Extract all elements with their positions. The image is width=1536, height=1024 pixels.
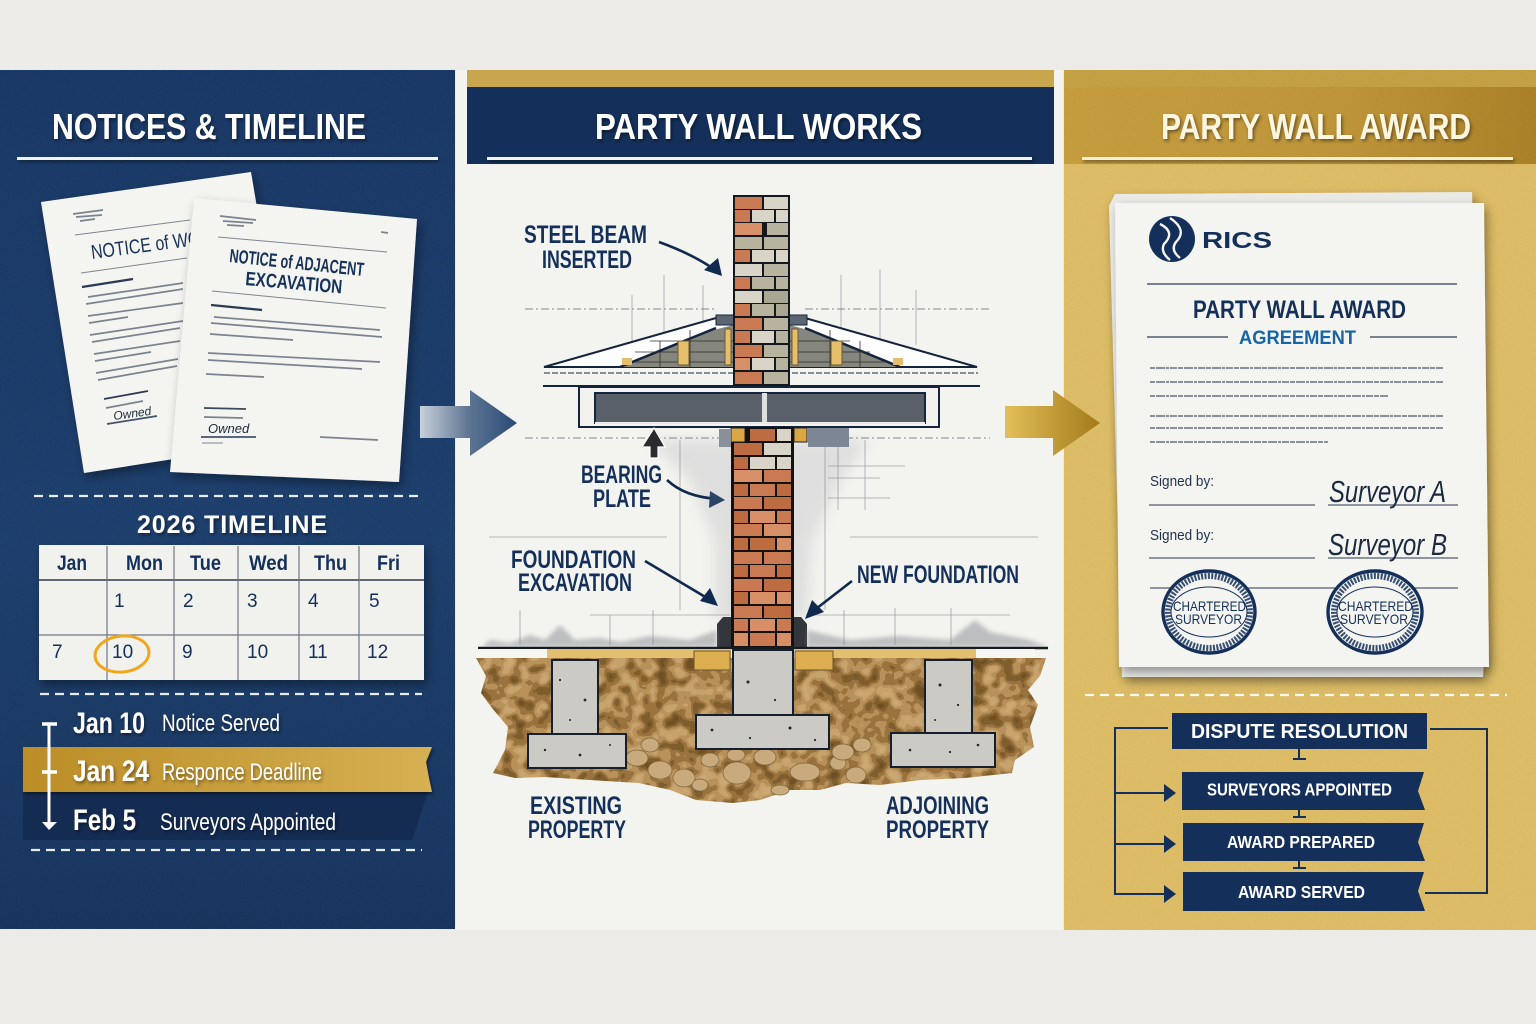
ribbon: surveyors appointed: [1182, 772, 1425, 810]
calendar dates: 1: [114, 591, 125, 612]
document subtitle: AGREEMENT: [1239, 328, 1356, 349]
award document: [1109, 192, 1489, 677]
labels: EXCAVATION: [518, 569, 632, 597]
calendar dates: 4: [308, 591, 319, 612]
roof: [543, 315, 980, 386]
labels: EXISTING: [530, 792, 622, 820]
labels: [511, 221, 1019, 844]
timeline entries: [73, 707, 336, 837]
document body text lines: [1150, 368, 1443, 442]
calendar dates: 7: [52, 642, 63, 663]
wall section diagram: [476, 195, 1048, 844]
stones: [626, 738, 871, 795]
document: notice of adjacent excavation: EXCAVATION: [245, 268, 343, 298]
upper brick column: [733, 195, 790, 386]
concrete foundations: [528, 650, 995, 768]
labels: NEW FOUNDATION: [857, 561, 1019, 589]
document title: PARTY WALL AWARD: [1193, 296, 1406, 324]
signature rows: Surveyor A: [1329, 474, 1446, 509]
calendar dates: 3: [247, 591, 258, 612]
calendar dates: 9: [182, 642, 193, 663]
stamp: chartered surveyor B: CHARTERED: [1338, 598, 1413, 614]
calendar header row: Tue: [190, 552, 221, 575]
calendar header row: [57, 552, 400, 575]
document: notice of adjacent excavation: [170, 198, 417, 482]
timeline arrow: [42, 724, 57, 830]
timeline entries: Feb 5: [73, 804, 136, 837]
labels: PROPERTY: [528, 816, 626, 844]
timeline entries: Jan 10: [73, 707, 145, 740]
labels: INSERTED: [542, 246, 632, 274]
ribbon: award served: [1183, 872, 1425, 911]
panel: party wall works: [456, 70, 1063, 930]
dispute resolution flow: [1115, 713, 1487, 911]
calendar header row: Mon: [126, 552, 163, 575]
heading: party wall works: [487, 106, 1032, 160]
heading: notices and timeline: [17, 106, 438, 160]
heading: party wall award: [1082, 106, 1513, 160]
box: dispute resolution: [1172, 713, 1427, 749]
panel: party wall award: [1064, 70, 1536, 930]
callout arrows: [645, 242, 852, 619]
ground line: [478, 620, 1048, 670]
stamp: chartered surveyor A: [1163, 571, 1255, 653]
calendar dates: [52, 591, 388, 663]
ribbon: award prepared: AWARD PREPARED: [1227, 832, 1375, 852]
signature rows: Surveyor B: [1328, 527, 1447, 562]
construction lines: [489, 270, 1038, 645]
heading: notices and timeline: NOTICES & TIMELINE: [52, 106, 366, 147]
calendar header row: Wed: [249, 552, 288, 575]
labels: BEARING: [581, 461, 662, 489]
document: notice of works: [41, 172, 296, 473]
labels: ADJOINING: [886, 792, 989, 820]
timeline entries: Responce Deadline: [162, 759, 322, 786]
ribbon: award prepared: [1183, 823, 1425, 861]
heading: party wall award: PARTY WALL AWARD: [1161, 106, 1471, 147]
calendar dates: 2: [183, 591, 194, 612]
labels: STEEL BEAM: [524, 221, 647, 249]
panel: notices and timeline: [0, 70, 455, 929]
arrow: bearing plate marker: [642, 428, 665, 458]
rics logo: [1149, 216, 1272, 262]
calendar dates: 10: [112, 642, 133, 663]
steel beam: [579, 387, 939, 427]
heading: party wall works: PARTY WALL WORKS: [595, 106, 922, 147]
timeline entries: Notice Served: [162, 710, 280, 737]
date circle highlight: [93, 633, 151, 675]
calendar header row: Jan: [57, 552, 87, 575]
heading: 2026 timeline: 2026 TIMELINE: [137, 511, 327, 539]
rics logo: RICS: [1202, 227, 1272, 253]
stamp: chartered surveyor A: SURVEYOR: [1175, 611, 1242, 627]
ribbon: surveyors appointed: SURVEYORS APPOINTED: [1207, 780, 1392, 800]
document: notice of works: NOTICE of WO: [90, 228, 202, 264]
timeline ribbons: [23, 747, 432, 840]
arrow: notices to works: [420, 390, 517, 456]
calendar header row: Fri: [377, 552, 400, 575]
timeline entries: Jan 24: [73, 755, 149, 788]
sketch wash: [650, 440, 870, 620]
timeline entries: Surveyors Appointed: [160, 809, 336, 836]
calendar dates: 10: [247, 642, 268, 663]
calendar dates: 11: [308, 642, 328, 663]
calendar dates: 12: [367, 642, 388, 663]
arrow: works to award: [1005, 390, 1100, 456]
calendar: [39, 545, 424, 680]
flow connector lines: [1115, 728, 1487, 903]
labels: FOUNDATION: [511, 546, 636, 574]
box: dispute resolution: DISPUTE RESOLUTION: [1191, 721, 1408, 743]
stamp: chartered surveyor B: [1328, 571, 1422, 653]
soil: [476, 658, 1046, 803]
ribbon: award served: AWARD SERVED: [1238, 882, 1365, 902]
stamp: chartered surveyor B: SURVEYOR: [1340, 611, 1408, 627]
lower brick column: [717, 427, 849, 648]
document: notice of works: Owned: [112, 404, 152, 423]
calendar dates: 5: [369, 591, 380, 612]
signature rows: [1149, 474, 1458, 588]
labels: PLATE: [593, 485, 651, 513]
document: notice of adjacent excavation: Owned: [208, 421, 250, 436]
signature rows: Signed by:: [1150, 474, 1214, 490]
signature rows: Signed by:: [1150, 528, 1214, 544]
document: notice of adjacent excavation: NOTICE of ADJACENT: [228, 246, 365, 281]
stamp: chartered surveyor A: CHARTERED: [1173, 598, 1246, 614]
labels: PROPERTY: [886, 816, 989, 844]
calendar header row: Thu: [314, 552, 347, 575]
